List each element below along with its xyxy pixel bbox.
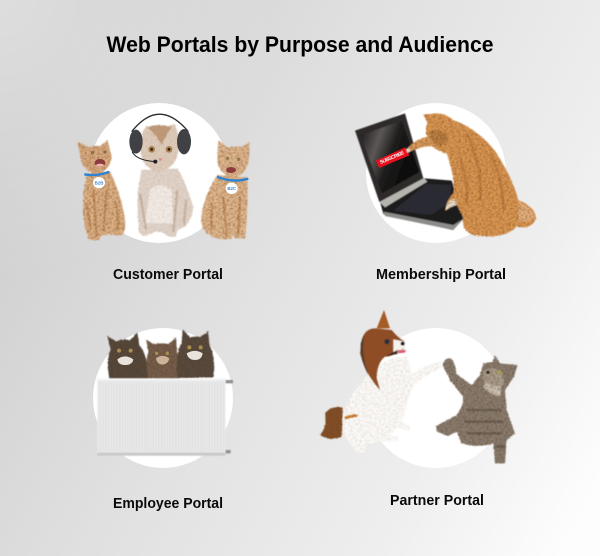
panel: partner portal [320,310,517,509]
three tabby kittens [107,329,214,379]
radiator [97,378,233,456]
label: membership portal: Membership Portal [376,267,506,283]
left kitten [77,140,125,240]
illustration: cat on laptop [355,113,536,236]
white circle: customer [89,103,229,243]
white circle: employee [93,328,233,468]
centre kitten with headset [129,114,193,237]
right kitten [201,140,250,239]
label: partner portal: Partner Portal [390,493,484,509]
white circle: membership [366,103,506,243]
left kitten: B2B [95,180,103,185]
laptop [355,113,464,230]
orange cat [406,113,536,236]
illustration: dog and cat high five [320,310,517,463]
illustration: three kittens [77,114,250,240]
panel: membership portal [355,103,536,283]
subscribe button: SUBSCRIBE [379,150,406,166]
panel: employee portal [93,328,233,512]
papillon dog [320,310,442,453]
panel: customer portal [77,103,250,283]
right kitten: B2C [227,186,236,191]
label: customer portal: Customer Portal [113,267,223,283]
subscribe button [376,147,409,168]
white circle: partner [366,328,506,468]
illustration: kittens on radiator [97,329,233,456]
label: employee portal: Employee Portal [113,496,223,512]
grey tabby cat [436,355,517,463]
title: Web Portals by Purpose and Audience [106,32,494,57]
